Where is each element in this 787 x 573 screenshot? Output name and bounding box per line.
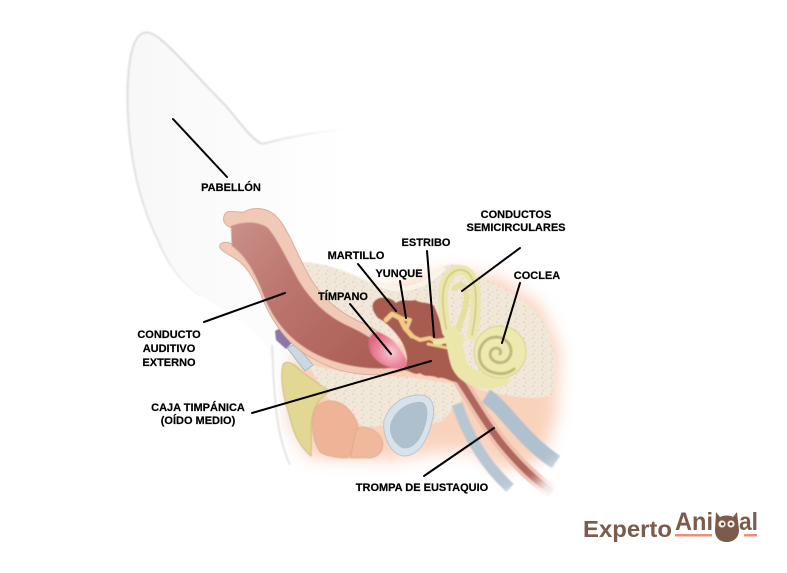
semicircular canals and vestibule	[436, 270, 502, 381]
tissue glow	[288, 270, 560, 470]
label: conductos semicirculares: SEMICIRCULARES	[466, 222, 566, 234]
icon: cat	[715, 512, 739, 542]
label: conducto auditivo externo: AUDITIVO	[143, 343, 196, 355]
tympanic cavity	[373, 298, 459, 382]
label: coclea: COCLEA	[514, 270, 560, 282]
logo: ExpertoAnimal: Ani	[675, 508, 713, 536]
logo: ExpertoAnimal: Experto	[583, 516, 672, 542]
eardrum (tímpano)	[369, 332, 407, 369]
temporal bone, upper right	[430, 264, 556, 398]
cochlea spiral	[474, 326, 526, 378]
external ear canal lumen	[231, 222, 402, 368]
light blue cartilage	[287, 344, 313, 371]
label: pabellón: PABELLÓN	[201, 181, 261, 194]
blue-grey tissue beside tube	[457, 396, 556, 488]
purple cartilage	[275, 327, 293, 349]
label: conducto auditivo externo: CONDUCTO	[137, 329, 201, 341]
trompa de eustaquio tube	[458, 378, 552, 492]
label: caja timpánica: (OÍDO MEDIO)	[161, 414, 236, 427]
logo: ExpertoAnimal: al	[739, 508, 758, 536]
label: conductos semicirculares: CONDUCTOS	[481, 209, 551, 221]
leader lines	[173, 119, 520, 476]
label: caja timpánica: CAJA TIMPÁNICA	[151, 401, 245, 414]
label: martillo: MARTILLO	[328, 250, 385, 262]
label: conducto auditivo externo: EXTERNO	[142, 357, 196, 369]
bone, above canal	[300, 262, 440, 345]
yellow gland	[282, 362, 330, 456]
label: trompa de eustaquio: TROMPA DE EUSTAQUIO	[356, 482, 489, 494]
ossicles: malleus, incus, stapes	[386, 314, 448, 348]
fade of the lower right tissue	[490, 440, 590, 512]
white arc of bony roof	[368, 268, 444, 289]
pink salivary gland	[313, 401, 383, 458]
logo: ExpertoAnimal	[583, 508, 758, 542]
external ear canal wall	[220, 209, 412, 375]
ear pinna silhouette	[128, 32, 345, 465]
label: tímpano: TÍMPANO	[318, 290, 368, 303]
label: yunque: YUNQUE	[375, 268, 423, 280]
blue-grey bulla	[384, 395, 434, 456]
label: estribo: ESTRIBO	[402, 237, 451, 249]
bone, lower	[308, 364, 462, 428]
